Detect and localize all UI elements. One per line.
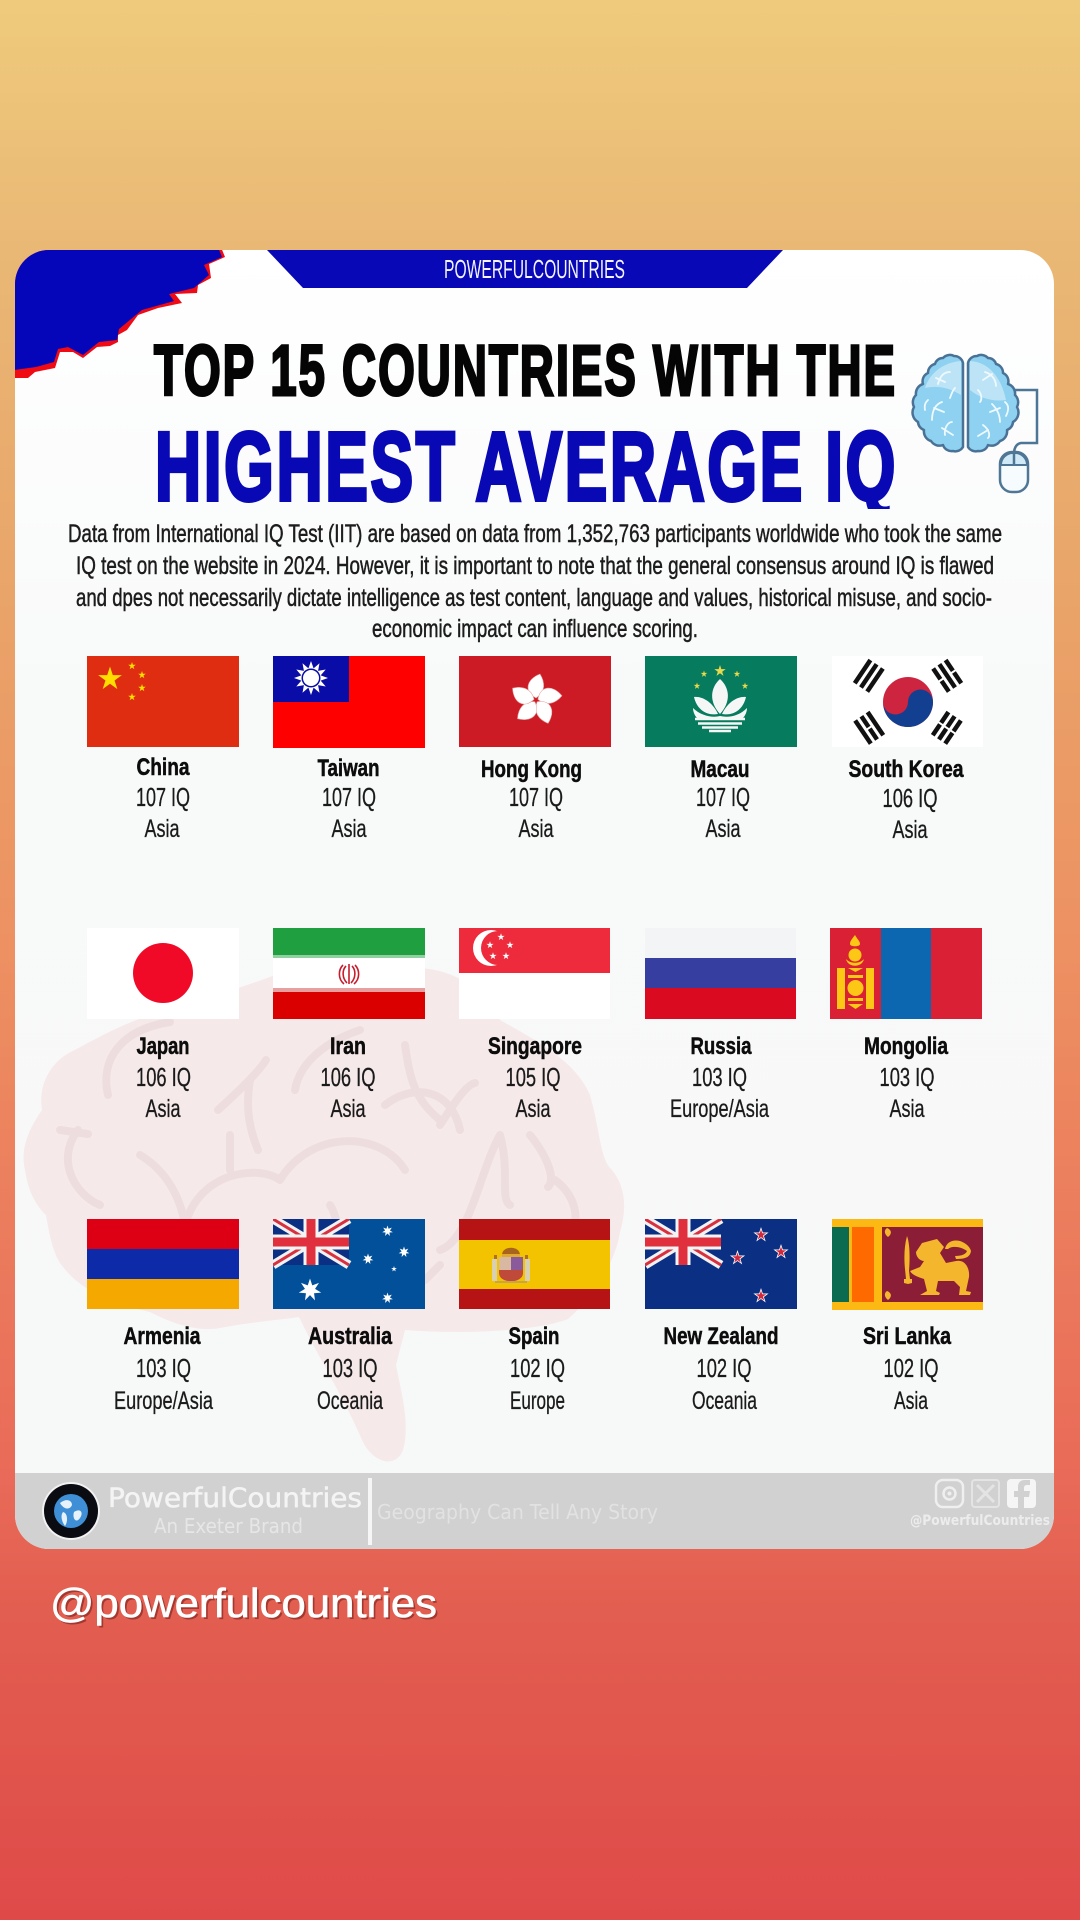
country: Australia [273, 1219, 425, 1415]
footer logo [42, 1482, 100, 1540]
flag: Australia [273, 1219, 425, 1309]
country: China: Asia [144, 815, 180, 843]
country: Japan: Japan [136, 1033, 190, 1060]
country: Spain: Europe [510, 1387, 565, 1415]
top banner: POWERFULCOUNTRIES [444, 254, 625, 284]
country: Singapore: Asia [516, 1095, 551, 1123]
country: Singapore: Singapore [488, 1033, 582, 1060]
country: Spain: 102 IQ [510, 1353, 565, 1383]
country: Iran: Asia [330, 1095, 366, 1123]
icon: facebook [1007, 1479, 1036, 1508]
country: South Korea [832, 656, 983, 844]
flag: South Korea [853, 658, 963, 745]
handle caption: @powerfulcountries [50, 1580, 437, 1626]
country: Macau [645, 656, 797, 843]
country: Japan: Asia [146, 1095, 181, 1123]
flag: China [87, 656, 239, 747]
footer band [15, 1473, 1054, 1553]
flag: Russia [645, 958, 796, 1019]
country: China: China [136, 754, 190, 781]
footer brand name: PowerfulCountries [108, 1483, 362, 1514]
handle caption: @powerfulcountries [52, 1582, 439, 1628]
flag: Armenia [87, 1219, 239, 1309]
country: Taiwan [273, 656, 425, 843]
country: Japan [87, 928, 239, 1123]
icon: instagram [936, 1480, 963, 1507]
flag: Japan [133, 943, 239, 1019]
flag: Sri Lanka [832, 1219, 983, 1310]
country: China: 107 IQ [136, 782, 190, 812]
country: Hong Kong: Hong Kong [481, 756, 582, 783]
corner torn blue and red shape [15, 250, 225, 378]
country: Singapore: 105 IQ [506, 1062, 560, 1092]
flag: Singapore [459, 928, 610, 1019]
country: Mongolia: Asia [890, 1095, 925, 1123]
country: Hong Kong: Asia [518, 815, 554, 843]
country: Hong Kong [459, 656, 611, 843]
country: Armenia [87, 1219, 239, 1415]
flag: New Zealand [645, 1219, 797, 1309]
panel: infographic card [0, 240, 1054, 1553]
country: Taiwan: 107 IQ [322, 782, 376, 812]
intro paragraph [68, 520, 1002, 643]
country: Armenia: Europe/Asia [114, 1387, 213, 1415]
country: Spain: Spain [508, 1323, 560, 1350]
flag: Iran [273, 928, 425, 1019]
footer tagline: Geography Can Tell Any Story [377, 1500, 658, 1524]
country: Macau: Asia [706, 815, 741, 843]
country: Russia [645, 928, 796, 1123]
country: Sri Lanka: 102 IQ [884, 1353, 938, 1383]
intro paragraph: economic impact can influence scoring. [372, 615, 698, 643]
country: Taiwan: Taiwan [318, 755, 380, 782]
country: Armenia: 103 IQ [136, 1353, 191, 1383]
footer handle: @PowerfulCountries [910, 1513, 1050, 1529]
country: Mongolia: Mongolia [864, 1033, 949, 1060]
country: Japan: 106 IQ [136, 1062, 191, 1092]
country: Mongolia [830, 928, 982, 1123]
watermark: pale brain [24, 963, 624, 1461]
country: New Zealand: New Zealand [664, 1323, 778, 1350]
country: South Korea: South Korea [848, 756, 964, 783]
country: China [87, 656, 239, 843]
country: Hong Kong: 107 IQ [509, 782, 563, 812]
country: Iran: 106 IQ [320, 1062, 376, 1092]
country: South Korea: 106 IQ [882, 783, 938, 813]
country: Taiwan: Asia [332, 815, 367, 843]
flag: Spain [459, 1219, 610, 1309]
country: Sri Lanka [832, 1219, 983, 1415]
country: Russia: 103 IQ [692, 1062, 747, 1092]
country: New Zealand: 102 IQ [696, 1353, 752, 1383]
country: Mongolia: 103 IQ [880, 1062, 934, 1092]
country: Singapore [459, 928, 610, 1123]
country: Sri Lanka: Asia [894, 1387, 928, 1415]
footer brand subtitle: An Exeter Brand [154, 1514, 303, 1538]
flag: Taiwan [273, 656, 425, 748]
country: New Zealand: Oceania [692, 1387, 757, 1415]
top banner [267, 250, 783, 288]
country: Iran: Iran [330, 1033, 366, 1060]
country: Armenia: Armenia [124, 1323, 201, 1350]
flag: Mongolia [830, 928, 982, 1019]
country: Iran [273, 928, 425, 1123]
country: New Zealand [645, 1219, 797, 1415]
icon: brain with mouse [913, 355, 1037, 492]
icon: X [972, 1480, 999, 1507]
country: Australia: 103 IQ [322, 1353, 378, 1383]
country: Spain [459, 1219, 610, 1415]
country: South Korea: Asia [892, 816, 928, 844]
country: Macau: Macau [690, 756, 750, 783]
country: Russia: Europe/Asia [670, 1095, 769, 1123]
flag: Hong Kong [459, 656, 611, 747]
country: Australia: Oceania [317, 1387, 383, 1415]
country: Australia: Australia [308, 1323, 393, 1350]
country: Russia: Russia [690, 1033, 752, 1060]
country: Sri Lanka: Sri Lanka [863, 1323, 952, 1350]
flag: Macau [645, 656, 797, 747]
country: Macau: 107 IQ [696, 782, 750, 812]
